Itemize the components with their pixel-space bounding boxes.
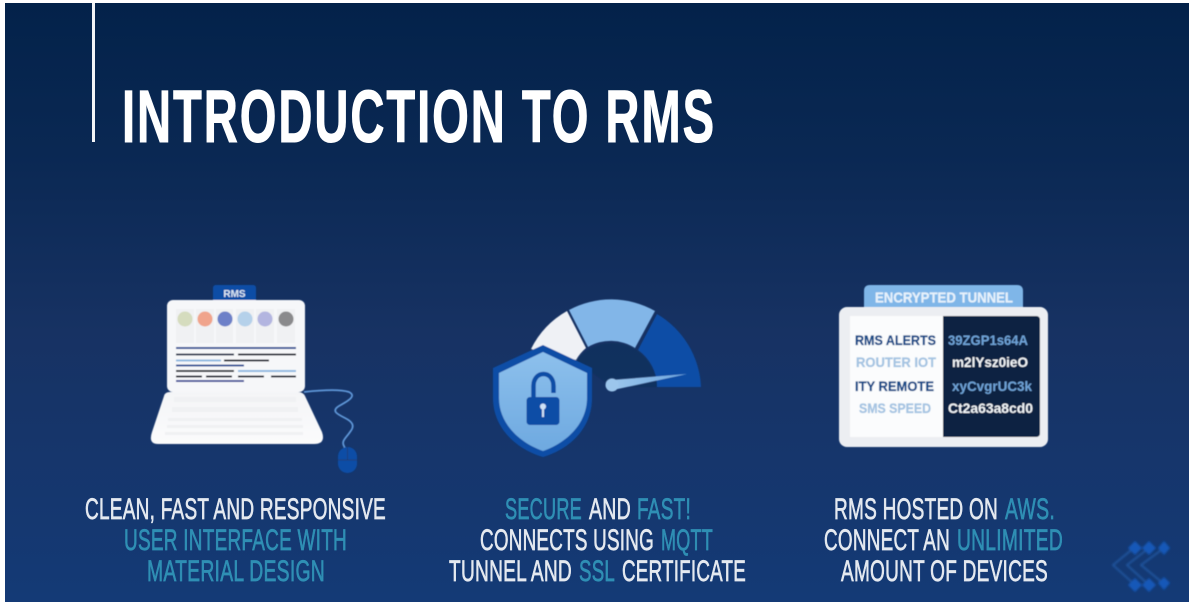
caption: hosting xyxy=(824,493,1063,588)
keyboard rows xyxy=(165,397,303,435)
caption: security: SECURE xyxy=(505,493,582,526)
caption: security: CERTIFICATE xyxy=(622,555,746,588)
plain text column xyxy=(850,316,944,437)
caption: hosting: CONNECT AN xyxy=(824,524,950,557)
shield xyxy=(493,345,592,457)
padlock xyxy=(526,374,560,425)
icon: corner logo xyxy=(1113,541,1170,592)
icon: speed gauge and shield xyxy=(493,299,701,457)
tunnel card xyxy=(839,307,1048,447)
dashboard cards xyxy=(176,309,295,343)
gauge segment: light blue xyxy=(569,299,655,348)
tunnel heading tab xyxy=(864,285,1023,308)
tunnel heading tab: ENCRYPTED TUNNEL xyxy=(875,290,1013,306)
encrypted text column: m2lYsz0ieO xyxy=(952,354,1028,370)
plain text column: ROUTER IOT xyxy=(856,354,936,370)
plain text column: ITY REMOTE xyxy=(855,378,934,394)
gauge segment: dark blue xyxy=(638,314,701,387)
gauge needle xyxy=(606,374,687,392)
caption: security: AND xyxy=(589,493,631,526)
icon: encrypted tunnel xyxy=(839,285,1048,447)
caption: security: SSL xyxy=(579,555,615,588)
encrypted text column: 39ZGP1s64A xyxy=(948,332,1028,348)
caption: security: TUNNEL AND xyxy=(449,555,572,588)
caption: interface: USER INTERFACE WITH xyxy=(124,524,347,557)
caption: security: FAST! xyxy=(637,493,691,526)
mouse cord xyxy=(304,390,353,453)
caption: security: CONNECTS USING xyxy=(480,524,654,557)
encrypted text column: xyCvgrUC3k xyxy=(952,378,1032,394)
caption: hosting: UNLIMITED xyxy=(957,524,1063,557)
caption: hosting: AMOUNT OF DEVICES xyxy=(841,555,1048,588)
mouse xyxy=(338,447,357,473)
caption: hosting: AWS. xyxy=(1005,493,1055,526)
title accent bar xyxy=(92,3,95,142)
encrypted text column xyxy=(943,316,1040,437)
plain text column: SMS SPEED xyxy=(859,400,931,416)
RMS tab xyxy=(213,285,256,300)
RMS tab: RMS xyxy=(223,289,246,300)
caption: interface: MATERIAL DESIGN xyxy=(147,555,325,588)
gauge segment: white xyxy=(531,311,586,360)
caption: security: MQTT xyxy=(661,524,713,557)
caption: interface xyxy=(85,493,386,588)
caption: security xyxy=(449,493,746,588)
laptop screen xyxy=(167,300,305,392)
encrypted text column: Ct2a63a8cd0 xyxy=(948,400,1033,416)
gauge hub xyxy=(576,343,657,387)
caption: hosting: RMS HOSTED ON xyxy=(834,493,998,526)
laptop base xyxy=(151,392,323,444)
caption: interface: CLEAN, FAST AND RESPONSIVE xyxy=(85,493,386,526)
title: INTRODUCTION TO RMS xyxy=(122,75,716,158)
plain text column: RMS ALERTS xyxy=(855,332,936,348)
icon: laptop with mouse xyxy=(151,285,357,473)
text lines on screen xyxy=(176,347,296,382)
